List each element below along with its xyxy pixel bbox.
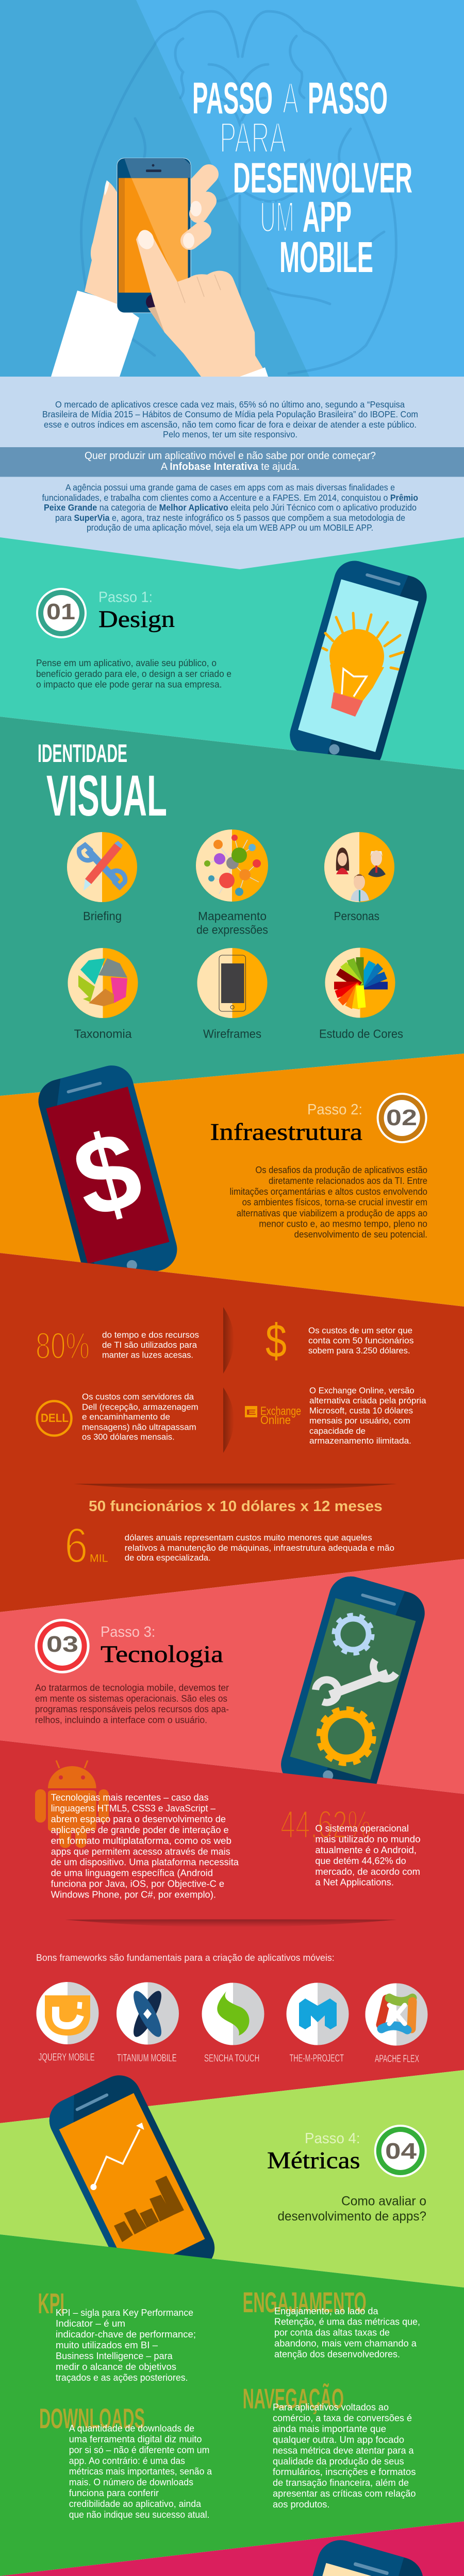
panel: step 3 tecnologia xyxy=(0,1559,464,1806)
metric: navegacao: formulários, inscrições e formatos xyxy=(273,2467,416,2477)
metric: KPI: Indicator – é um xyxy=(56,2318,125,2329)
labels: Briefing xyxy=(83,909,122,923)
stat: 80%: manter as luzes acesas. xyxy=(102,1350,193,1360)
icon: estudo de cores xyxy=(325,948,395,1018)
metric: KPI: medir o alcance de objetivos xyxy=(56,2362,176,2372)
frameworks heading: Bons frameworks são fundamentais para a criação de aplicativos móveis: xyxy=(36,1953,335,1963)
stat: 80%: de TI são utilizados para xyxy=(102,1340,197,1350)
panel: step 1 design xyxy=(0,537,464,775)
stat: exchange online: alternativa criada pela própria xyxy=(309,1396,426,1405)
icon: phone with light bulb xyxy=(285,556,432,775)
heading: Passo 1: xyxy=(98,589,153,606)
stat: dell: mensagens) não ultrapassam xyxy=(82,1422,196,1432)
framework labels: SENCHA TOUCH xyxy=(204,2053,259,2064)
text block: relhos, incluindo a interface com o usuário. xyxy=(35,1715,207,1725)
title: UM xyxy=(260,193,294,241)
metric: navegacao: ainda mais importante que xyxy=(273,2424,386,2434)
title: A xyxy=(283,74,299,123)
text block: Pense em um aplicativo, avalie seu público, o xyxy=(36,658,217,668)
labels: Wireframes xyxy=(203,1027,261,1040)
panel: step 2 infraestrutura xyxy=(0,1054,464,1307)
text block: android share: que detém 44,62% do xyxy=(315,1856,406,1866)
question text: Como avaliar o xyxy=(341,2194,426,2208)
metric: navegacao: Para aplicativos voltados ao xyxy=(273,2402,389,2413)
metric: downloads: funciona para conferir xyxy=(69,2488,159,2498)
metric: engajamento: atenção dos desenvolvedores. xyxy=(274,2349,400,2360)
text block: agency paragraph: A agência possui uma grande gama de cases em apps com as mais diversas finalidades e xyxy=(65,482,395,493)
metric: downloads: app. Ao contrário: é uma das xyxy=(69,2455,185,2466)
metric: navegacao xyxy=(243,2383,416,2510)
text block: recent technologies: linguagens HTML5, CSS3 e JavaScript – xyxy=(51,1803,216,1814)
panel: introduction xyxy=(0,377,464,569)
metric: KPI: indicador-chave de performance; xyxy=(56,2329,196,2340)
icon: mapeamento xyxy=(196,829,268,902)
callout band: Quer produzir um aplicativo móvel e não sabe por onde começar? xyxy=(85,450,376,462)
metric: KPI: KPI xyxy=(38,2287,64,2319)
framework labels xyxy=(39,2052,419,2065)
text block: menor custo e, ao mesmo tempo, pleno no xyxy=(259,1219,427,1229)
text block: android share: O sistema operacional xyxy=(315,1823,409,1834)
title xyxy=(192,74,412,281)
stat: 6 mil: 6 xyxy=(64,1518,88,1573)
text block: agency paragraph: funcionalidades, e trabalha com clientes como a Accenture e a FAPES. Em 2014, conquistou o Prêmio xyxy=(42,493,418,503)
icon: phone with dollar: $ xyxy=(61,1106,153,1242)
icon: the-m-project xyxy=(287,1982,349,2045)
stat: exchange online: Exchange xyxy=(260,1404,301,1418)
icon: taxonomia xyxy=(68,948,138,1018)
stat: 6 mil: de obra especializada. xyxy=(125,1553,211,1563)
icon: jquery mobile xyxy=(36,1982,99,2044)
stat: dell: DELL xyxy=(41,1411,69,1425)
labels xyxy=(74,909,403,1040)
framework labels: TITANIUM MOBILE xyxy=(117,2053,177,2064)
step badge 03: 03 xyxy=(46,1632,78,1657)
title: PASSO xyxy=(192,74,273,123)
heading: Infraestrutura xyxy=(210,1119,362,1146)
stat: dollar: conta com 50 funcionários xyxy=(308,1336,413,1346)
stat: dell: e encaminhamento de xyxy=(82,1412,170,1422)
panel: metric definitions xyxy=(0,2234,464,2576)
text block: agency paragraph: produção de uma aplicação móvel, seja ela um WEB APP ou um MOBILE APP. xyxy=(87,522,373,533)
metric: navegacao: qualquer outra. Um app focado xyxy=(273,2435,404,2445)
metric: downloads: métricas mais importantes, senão a xyxy=(69,2466,212,2477)
text block: agency paragraph: para SuperVia e, agora, traz neste infográfico os 5 passos que compõem a sua metodologia de xyxy=(55,513,405,523)
heading: Design xyxy=(98,606,175,633)
metric: KPI: Business Intelligence – para xyxy=(56,2351,173,2361)
metric: KPI: muito utilizados em BI – xyxy=(56,2340,158,2350)
heading: Passo 4: xyxy=(305,2130,360,2147)
metric: navegacao: qualidade da produção de seus xyxy=(273,2456,404,2467)
text block: intro paragraph: Brasileira de Mídia 2015 – Hábitos de Consumo de Mídia pela População Brasileira” do IBOPE. Com xyxy=(42,409,418,419)
heading: Métricas xyxy=(267,2147,360,2174)
metric: navegacao: comércio, a taxa de conversões é xyxy=(273,2413,412,2424)
heading xyxy=(38,740,167,828)
metric: downloads xyxy=(39,2402,212,2520)
step badge 02 xyxy=(377,1093,427,1143)
stat: dell xyxy=(37,1392,198,1442)
metric: navegacao: aos produtos. xyxy=(273,2499,330,2510)
panel: step 4 metricas xyxy=(0,2068,464,2300)
metric: engajamento: Engajamento, ao lado da xyxy=(274,2306,379,2316)
step badge 04 xyxy=(374,2125,427,2177)
metric: KPI: KPI – sigla para Key Performance xyxy=(56,2308,193,2318)
panel: step 5 publicacao xyxy=(0,2521,464,2576)
metric: downloads: que não indique seu sucesso atual. xyxy=(69,2510,209,2520)
step badge 04: 04 xyxy=(385,2139,417,2164)
stat: exchange online: capacidade de xyxy=(309,1426,366,1436)
metric: navegacao: NAVEGAÇÃO xyxy=(243,2383,344,2415)
panel: infrastructure costs xyxy=(0,1253,464,1612)
stat: 80% xyxy=(36,1326,199,1367)
title: MOBILE xyxy=(279,233,373,281)
title: PARA xyxy=(220,113,286,162)
text block: recent technologies: de um dispositivo. Uma plataforma necessita xyxy=(51,1857,239,1868)
text block: limitações orçamentárias e altos custos envolvendo xyxy=(230,1187,427,1197)
icon: wireframes xyxy=(197,948,267,1018)
icon: hand holding phone xyxy=(51,158,268,377)
heading: Tecnologia xyxy=(101,1641,223,1668)
panel: tecnologias e frameworks xyxy=(0,1740,464,2123)
stat: exchange online: mensais por usuário, com xyxy=(309,1416,410,1426)
text block: intro paragraph: esse e outros índices em ascensão, não tem como ficar de fora e deixar de atender a este público. xyxy=(44,419,417,430)
heading xyxy=(267,2130,360,2174)
icon: android xyxy=(35,1760,109,1848)
metric: downloads: uma ferramenta digital diz muito xyxy=(69,2434,202,2444)
framework labels: APACHE FLEX xyxy=(375,2054,419,2065)
icon: titanium mobile xyxy=(117,1982,179,2044)
labels: Taxonomia xyxy=(74,1027,132,1040)
heading: VISUAL xyxy=(46,764,167,828)
stat: dell: Dell (recepção, armazenagem xyxy=(82,1402,198,1412)
question text xyxy=(277,2194,426,2224)
stat: 44,62%: 44,62% xyxy=(280,1803,371,1847)
text block xyxy=(36,658,231,689)
stat: exchange online xyxy=(245,1386,426,1446)
labels: Personas xyxy=(334,909,379,923)
step badge 01: 01 xyxy=(46,599,75,624)
formula: 50 funcionários x 10 dólares x 12 meses xyxy=(89,1498,383,1515)
text block: recent technologies: Windows Phone, por C#, por exemplo). xyxy=(51,1890,216,1900)
stat: 6 mil: dólares anuais representam custos muito menores que aqueles xyxy=(125,1533,372,1543)
stat: dollar: sobem para 3.250 dólares. xyxy=(308,1346,410,1355)
text block: recent technologies: de uma linguagem específica (Android xyxy=(51,1868,213,1878)
text block: recent technologies: aplicações de grande poder de interação e xyxy=(51,1825,229,1835)
text block: recent technologies: apps que permitem acesso através de mais xyxy=(51,1846,230,1857)
text block: o impacto que ele pode gerar na sua empresa. xyxy=(36,679,222,689)
text block: android share: atualmente é o Android, xyxy=(315,1845,417,1855)
icon: phone with dollar xyxy=(34,1061,182,1290)
title: APP xyxy=(303,193,352,241)
icon: personas xyxy=(324,832,394,902)
text block: intro paragraph: O mercado de aplicativos cresce cada vez mais, 65% só no último ano, segundo a “Pesquisa xyxy=(55,399,405,410)
text block: agency paragraph xyxy=(42,482,418,533)
text block: em mente os sistemas operacionais. São eles os xyxy=(35,1693,227,1704)
metric: navegacao: de transação financeira, além de xyxy=(273,2478,409,2488)
metric: downloads: credibilidade ao aplicativo, ainda xyxy=(69,2499,202,2509)
labels: Estudo de Cores xyxy=(319,1027,403,1040)
metric: downloads: DOWNLOADS xyxy=(39,2402,145,2434)
metric: KPI xyxy=(38,2287,196,2383)
step badge 03 xyxy=(35,1619,90,1673)
text block: recent technologies: funciona por Java, iOS, por Objective-C e xyxy=(51,1879,224,1889)
callout band xyxy=(0,447,464,477)
heading: Passo 3: xyxy=(101,1624,155,1640)
icon: briefing xyxy=(67,832,137,902)
metric: engajamento: ENGAJAMENTO xyxy=(243,2286,367,2318)
text block: recent technologies: em formato multiplataforma, como os web xyxy=(51,1836,231,1846)
heading xyxy=(101,1624,223,1668)
text block: intro paragraph xyxy=(42,399,418,439)
stat: exchange online: armazenamento ilimitada. xyxy=(309,1436,411,1446)
metric: navegacao: nessa métrica deve atentar para a xyxy=(273,2446,414,2456)
framework labels: JQUERY MOBILE xyxy=(39,2052,95,2063)
heading: IDENTIDADE xyxy=(38,740,127,768)
text block: recent technologies xyxy=(51,1792,239,1900)
text block: agency paragraph: Peixe Grande na categoria de Melhor Aplicativo eleita pelo Júri Técnico com o aplicativo produzido xyxy=(44,502,417,513)
text block: recent technologies: Tecnologias mais recentes – caso das xyxy=(51,1792,209,1803)
callout band: A Infobase Interativa te ajuda. xyxy=(161,461,300,472)
stat: dell: Os custos com servidores da xyxy=(82,1392,194,1402)
heading xyxy=(98,589,175,633)
icon: phone with gears xyxy=(276,1571,430,1806)
hero panel xyxy=(0,0,464,377)
metric: navegacao: apresentar as críticas com relação xyxy=(273,2488,416,2499)
question text: desenvolvimento de apps? xyxy=(277,2209,426,2224)
icon: brain outline xyxy=(81,11,396,374)
stat: exchange online: O Exchange Online, versão xyxy=(309,1386,415,1396)
text block xyxy=(35,1683,229,1725)
icon: sencha touch xyxy=(202,1982,264,2045)
stat: dell: os 300 dólares mensais. xyxy=(82,1432,175,1442)
stat: dollar: $ xyxy=(266,1315,287,1367)
text block: diretamente relacionados aos da TI. Entre xyxy=(269,1176,427,1186)
metric: downloads: A quantidade de downloads de xyxy=(69,2423,194,2433)
text block: android share xyxy=(315,1823,421,1887)
metric: downloads: por si só – não é diferente com um xyxy=(69,2445,209,2455)
step badge 01 xyxy=(36,588,87,638)
stat: 6 mil: relativos à manutenção de máquinas, infraestrutura adequada e mão xyxy=(125,1543,394,1553)
icon: apache flex xyxy=(365,1984,428,2045)
stat: 6 mil: MIL xyxy=(90,1553,108,1565)
text block: programas responsáveis pelos recursos dos apa- xyxy=(35,1704,229,1715)
heading: Passo 2: xyxy=(307,1101,362,1118)
stat: dollar xyxy=(266,1315,413,1367)
text block: Os desafios da produção de aplicativos estão xyxy=(255,1165,427,1175)
metric: engajamento: Retenção, é uma das métricas que, xyxy=(274,2316,420,2327)
stat: 6 mil xyxy=(64,1518,394,1573)
stat: 80%: 80% xyxy=(36,1326,90,1367)
step badge 02: 02 xyxy=(386,1105,417,1130)
heading xyxy=(210,1101,362,1146)
text block: os ambientes físicos, torna-se crucial investir em xyxy=(242,1197,427,1207)
text block: recent technologies: abrem espaço para o desenvolvimento de xyxy=(51,1814,226,1824)
text block: android share: mercado, de acordo com xyxy=(315,1867,420,1877)
metric: engajamento xyxy=(243,2286,420,2360)
framework labels: THE-M-PROJECT xyxy=(289,2053,344,2064)
icon: phone with chart xyxy=(42,2068,222,2300)
text block: alternativas que viabilizem a produção de apps ao xyxy=(237,1208,427,1218)
stat: exchange online: Online xyxy=(260,1413,291,1427)
text block: desenvolvimento de seu potencial. xyxy=(294,1229,427,1240)
stat: exchange online: Microsoft, custa 10 dólares xyxy=(309,1406,413,1416)
text block: android share: a Net Applications. xyxy=(315,1877,394,1887)
stat: 80%: do tempo e dos recursos xyxy=(102,1330,199,1340)
text block: intro paragraph: Pelo menos, ter um site responsivo. xyxy=(163,429,297,439)
metric: KPI: traçados e as ações posteriores. xyxy=(56,2372,188,2383)
icon: phone with store xyxy=(261,2535,428,2576)
metric: engajamento: por conta das altas taxas de xyxy=(274,2328,390,2338)
stat: exchange online: E xyxy=(246,1408,256,1417)
text block: benefício gerado para ele, o design a ser criado e xyxy=(36,669,231,679)
text block: Ao tratarmos de tecnologia mobile, devemos ter xyxy=(35,1683,229,1693)
stat: dollar: Os custos de um setor que xyxy=(308,1326,412,1335)
title: PASSO xyxy=(308,74,388,123)
labels: de expressões xyxy=(196,923,268,936)
text block xyxy=(230,1165,427,1240)
labels: Mapeamento xyxy=(198,909,267,923)
text block: android share: mais utilizado no mundo xyxy=(315,1834,421,1844)
panel: identidade visual xyxy=(0,717,464,1096)
metric: downloads: mais. O número de downloads xyxy=(69,2477,193,2487)
metric: engajamento: abandono, mais vem chamando a xyxy=(274,2338,417,2348)
